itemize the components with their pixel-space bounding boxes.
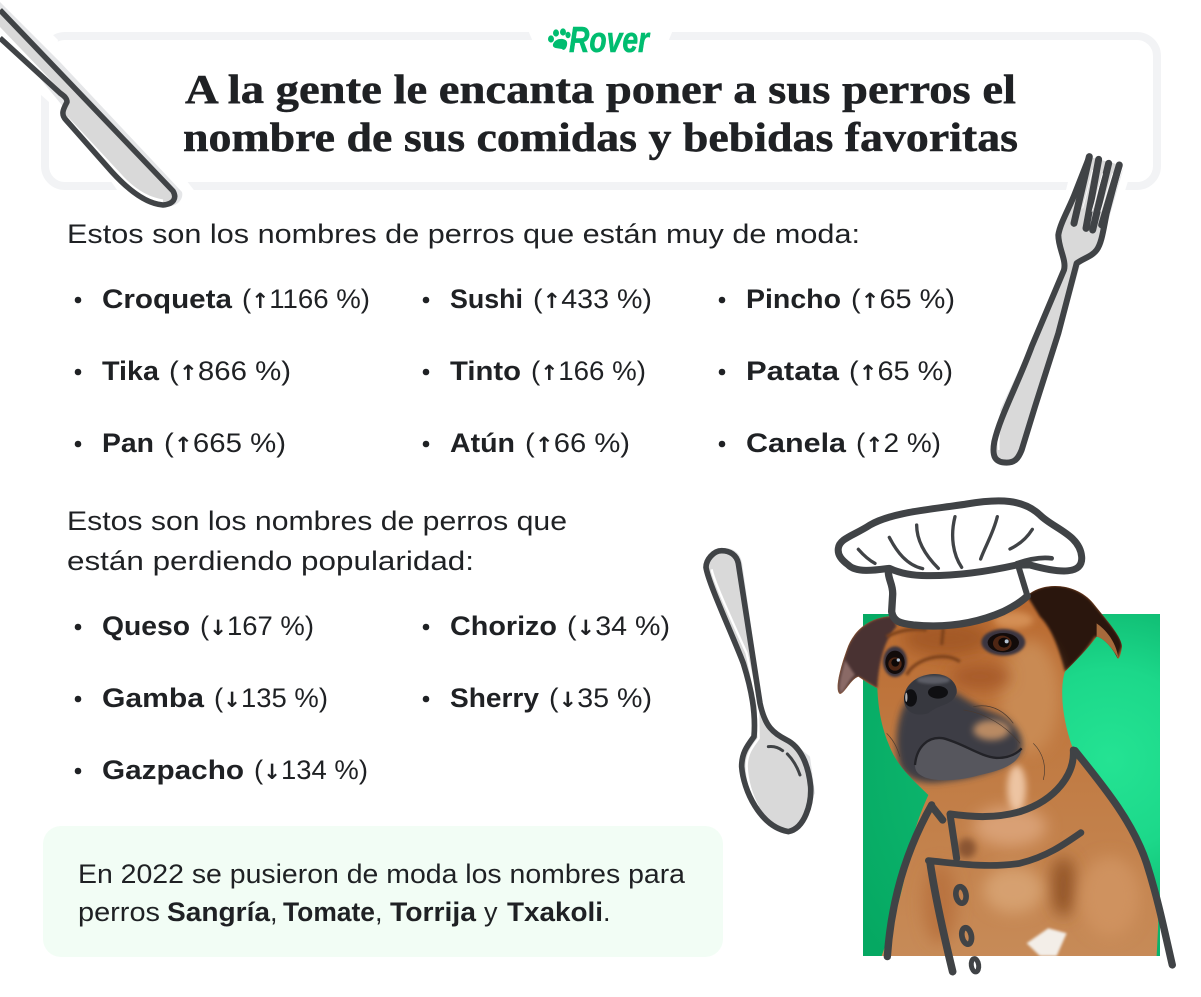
nose [904, 674, 957, 715]
list: rising names: (↑65 %) [851, 284, 955, 314]
intro: declining names: están perdiendo popularidad: [67, 546, 474, 576]
title: A la gente le encanta poner a sus perros el [185, 66, 1016, 112]
right ear [1027, 586, 1122, 672]
list: rising names: (↑866 %) [169, 356, 291, 386]
intro: trending names: Estos son los nombres de perros que están muy de moda: [67, 219, 860, 249]
list: declining names: Queso [102, 611, 190, 641]
list: declining names: Chorizo [450, 611, 557, 641]
list: rising names: Pincho [746, 284, 841, 314]
list: rising names: Tinto [450, 356, 521, 386]
callout: , [375, 897, 383, 927]
list: rising names: Sushi [450, 284, 523, 314]
list: rising names: (↑433 %) [533, 284, 652, 314]
list: rising names: (↑166 %) [531, 356, 646, 386]
green photo background [863, 614, 1160, 956]
list: rising names: Atún [450, 428, 515, 458]
list: rising names: Tika [102, 356, 160, 386]
list: declining names: (↓35 %) [549, 683, 652, 713]
list: declining names: (↓135 %) [214, 683, 328, 713]
list: rising names [75, 284, 955, 458]
list: declining names: Gamba [102, 683, 205, 713]
list: rising names: (↑1166 %) [242, 284, 370, 314]
list: rising names: (↑65 %) [849, 356, 953, 386]
whiskers [887, 706, 1045, 780]
left ear [838, 616, 897, 694]
dog photo [833, 580, 1167, 960]
callout: Torrija [390, 897, 477, 927]
callout: . [603, 897, 611, 927]
title: nombre de sus comidas y bebidas favoritas [183, 114, 1018, 160]
icon: fork [993, 157, 1124, 463]
logo: Rover: Rover [569, 19, 651, 60]
callout: En 2022 se pusieron de moda los nombres para [78, 859, 686, 889]
callout: Tomate [283, 897, 375, 927]
callout: y [484, 897, 498, 927]
list: declining names: (↓167 %) [200, 611, 314, 641]
forehead wrinkles [887, 628, 960, 675]
icon: knife [0, 2, 182, 206]
list: rising names: (↑2 %) [856, 428, 941, 458]
intro: declining names: Estos son los nombres de perros que [67, 506, 567, 536]
list: declining names: (↓34 %) [567, 611, 670, 641]
face shading [1000, 640, 1060, 753]
dog in chef outfit [833, 501, 1172, 972]
callout: , [270, 897, 278, 927]
callout: Txakoli [507, 897, 603, 927]
list: declining names: Sherry [450, 683, 539, 713]
list: rising names: Croqueta [102, 284, 233, 314]
chef jacket lines [887, 750, 1172, 972]
list: declining names: Gazpacho [102, 755, 244, 785]
list: declining names [75, 611, 670, 785]
logo: Rover [548, 19, 651, 60]
header frame [30, 25, 1157, 194]
intro: declining names [67, 506, 567, 576]
title [183, 66, 1018, 160]
callout [43, 826, 723, 957]
list: rising names: (↑665 %) [164, 428, 286, 458]
list: rising names: Patata [746, 356, 840, 386]
list: rising names: Canela [746, 428, 847, 458]
list: rising names: (↑66 %) [525, 428, 630, 458]
chef hat [838, 501, 1082, 626]
list: declining names: (↓134 %) [254, 755, 368, 785]
callout: perros [78, 897, 160, 927]
icon: spoon [706, 548, 815, 832]
icon: paw [548, 28, 571, 50]
muzzle [897, 689, 1022, 783]
callout: Sangría [167, 897, 271, 927]
list: rising names: Pan [102, 428, 154, 458]
eyes [883, 646, 907, 677]
